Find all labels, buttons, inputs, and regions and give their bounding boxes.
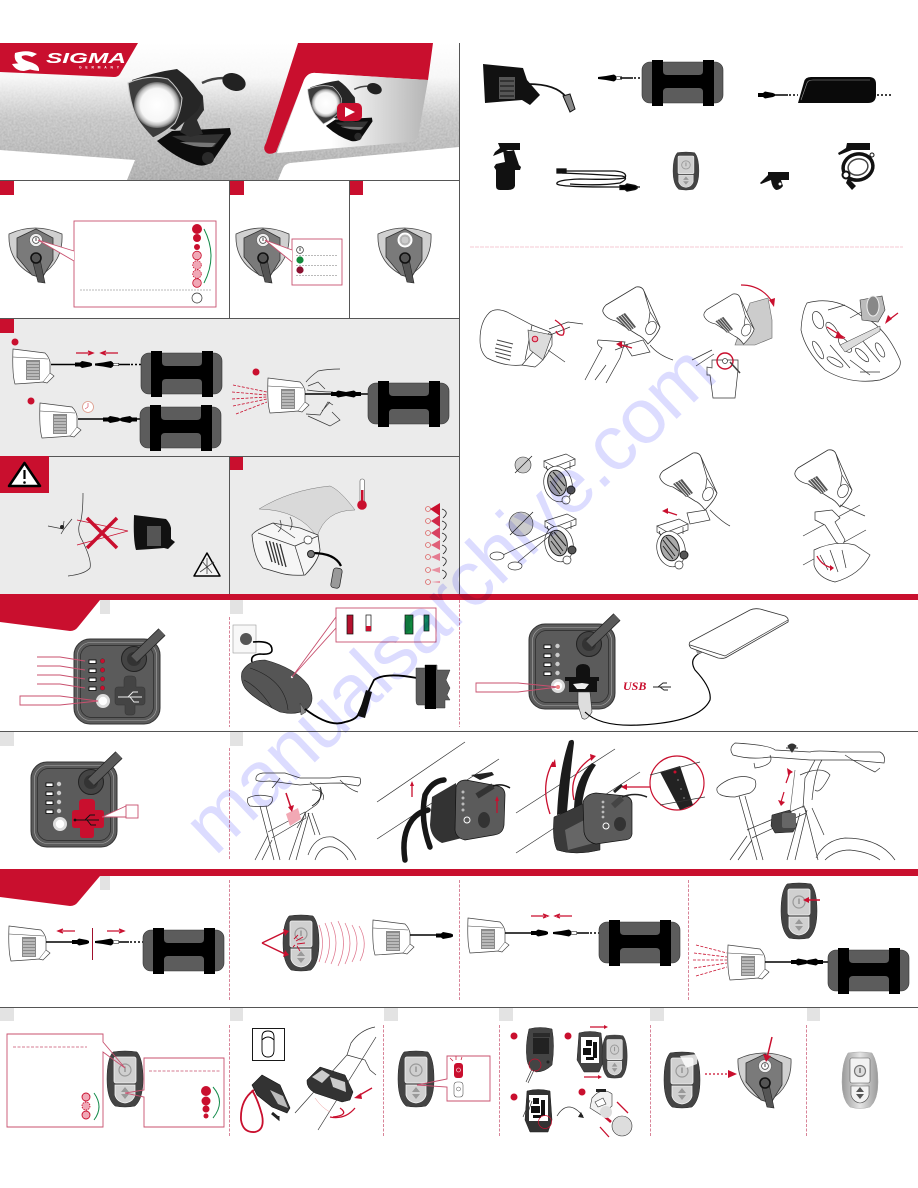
mode button callout (125, 1058, 224, 1127)
remote: strap mount (241, 1027, 376, 1132)
mount battery: bike frame position (247, 773, 361, 860)
scissors (490, 531, 553, 570)
mount battery: strap closing (516, 740, 705, 853)
watermark: manualsarchive.com (166, 326, 732, 869)
mount step: attach bracket (480, 310, 583, 367)
panel: switch on (232, 368, 449, 427)
step tabs (0, 181, 363, 470)
mount step: tilt and lock (692, 285, 775, 398)
logo wordmark: SIGMA (46, 50, 126, 67)
remote: pairing (262, 915, 453, 971)
panel: USB cover (31, 755, 138, 847)
remote: button functions (7, 1034, 224, 1127)
play button (337, 103, 362, 121)
mount step: slide onto handlebar (653, 453, 730, 570)
section tab: remote (0, 876, 110, 906)
grey panels background (0, 319, 459, 594)
remote: reconnect (468, 914, 680, 966)
cool-down sequence (426, 503, 446, 584)
mount step: clamp size (490, 454, 577, 570)
remote: switch on (693, 883, 909, 994)
mount step: tighten (795, 450, 870, 582)
smartphone (689, 609, 788, 658)
panel: USB output (476, 609, 788, 725)
panel: power on (9, 221, 216, 307)
hero lamp (128, 69, 248, 166)
strap detail magnifier (650, 756, 705, 810)
red divider bar 2 (0, 869, 918, 876)
top right: frame battery (758, 77, 891, 103)
accessory: handlebar mount (493, 143, 521, 190)
panel: status (236, 228, 342, 285)
USB mark: USB (623, 679, 646, 693)
video thumbnail lamp (308, 80, 383, 141)
step tabs battery (0, 600, 243, 746)
warning tab (0, 456, 49, 493)
dashed section dividers (230, 600, 806, 1137)
logo badge (0, 43, 138, 77)
remote: ready (842, 1052, 878, 1108)
USB icon (653, 683, 671, 690)
hero banner photo (0, 43, 459, 180)
panel: heat warning (252, 479, 446, 589)
remote: battery change (510, 1025, 632, 1137)
remote: status LED (398, 1051, 490, 1107)
remote: disconnect (9, 926, 224, 974)
status callout (265, 239, 342, 285)
mount battery: final on bike (717, 743, 895, 860)
charge state callout (292, 608, 436, 677)
panel: charger (233, 608, 450, 723)
accessory: helmet mount (760, 172, 789, 190)
thermometer (357, 479, 367, 510)
top right: battery (598, 60, 723, 106)
accessory: clamp (838, 143, 876, 190)
LED callout lines (20, 657, 98, 705)
remote: film and attach (664, 1037, 791, 1108)
mode callout (38, 221, 216, 307)
panel: connect battery (12, 338, 222, 451)
mount step: helmet (801, 296, 900, 381)
panel: do not look into the light (48, 493, 220, 576)
power button callout (7, 1034, 125, 1127)
accessory: remote (673, 152, 699, 190)
logo sub text: GERMANY (79, 66, 120, 70)
accessory: extension cable (557, 169, 640, 191)
red divider bar 1 (0, 594, 918, 600)
logo swoosh icon (12, 51, 39, 71)
video tab (264, 43, 433, 154)
panel: battery LED status (20, 632, 162, 724)
laser warning sign (194, 553, 220, 576)
mount step: slide onto bracket (585, 287, 673, 383)
panel: button lit (378, 228, 431, 283)
mount battery: strap open (377, 742, 510, 860)
section tab: battery (0, 600, 110, 631)
divider (470, 246, 903, 248)
top right: lamp head (483, 64, 575, 112)
remote step tabs (0, 1008, 820, 1021)
